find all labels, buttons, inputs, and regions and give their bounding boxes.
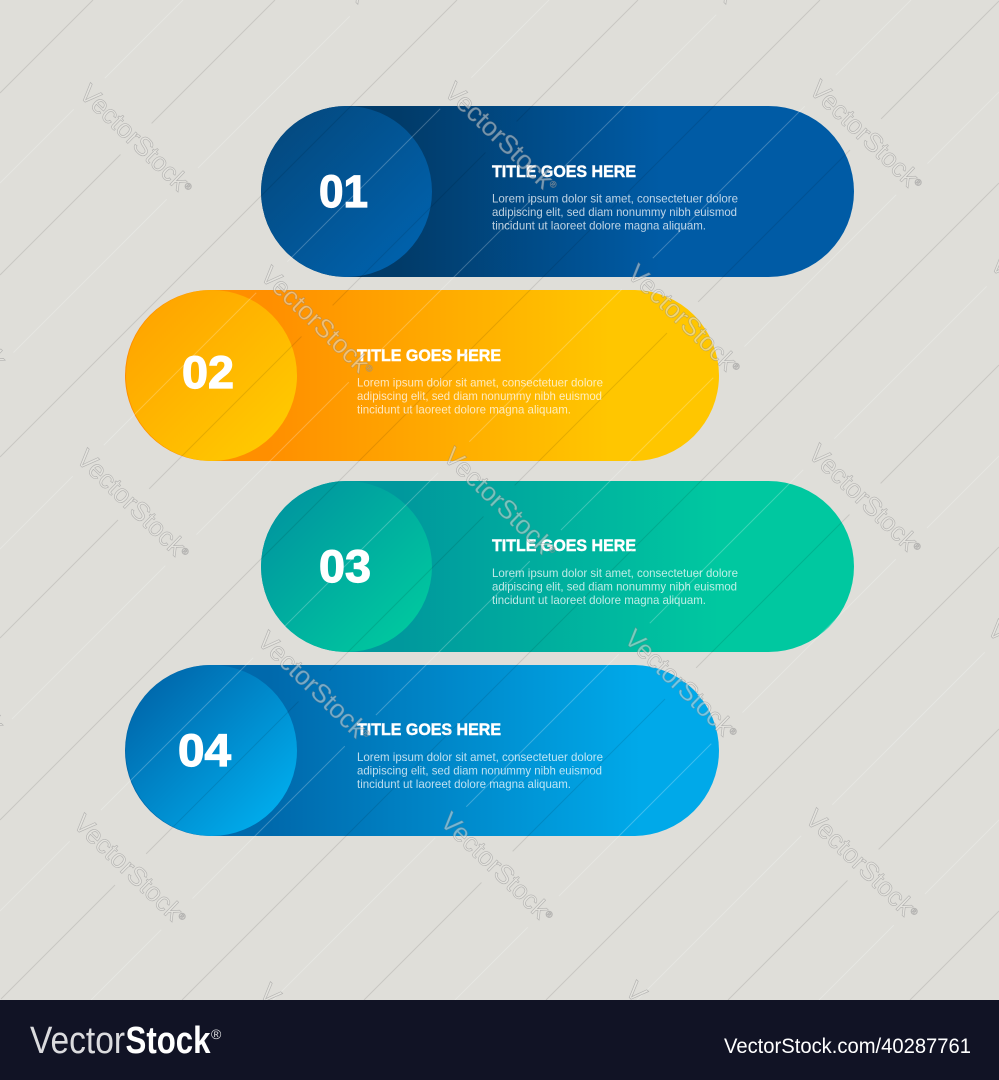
pill 01 xyxy=(261,106,854,277)
pill 03 xyxy=(261,481,854,652)
watermarks: ® xyxy=(912,177,924,189)
footer bar xyxy=(0,1000,999,1080)
circle 03 xyxy=(261,481,432,652)
watermarks: V xyxy=(254,977,287,1011)
watermarks: VectorStock xyxy=(74,78,194,196)
circle 01 xyxy=(261,106,432,277)
title 01: TITLE GOES HERE xyxy=(492,163,636,181)
number 02: 02 xyxy=(182,347,234,398)
watermarks: VectorStock xyxy=(255,260,375,378)
body text 04: tincidunt ut laoreet dolore magna aliquam. xyxy=(357,777,571,791)
watermarks: VectorStock xyxy=(622,258,742,376)
pill 02 xyxy=(125,290,719,461)
panel: step 02 xyxy=(125,290,719,461)
footer logo xyxy=(30,1020,222,1062)
title 04: TITLE GOES HERE xyxy=(357,721,501,739)
footer image id: VectorStock.com/40287761 xyxy=(724,1035,971,1058)
footer logo: Stock xyxy=(126,1020,211,1062)
watermarks: VectorStock xyxy=(439,76,559,194)
watermarks: ® xyxy=(179,546,191,558)
footer logo: Vector xyxy=(30,1020,125,1062)
body text 02: tincidunt ut laoreet dolore magna aliquam. xyxy=(357,402,571,416)
watermarks: V xyxy=(620,975,653,1009)
watermarks: ® xyxy=(543,909,555,921)
watermarks: ® xyxy=(730,361,742,373)
body text 03: tincidunt ut laoreet dolore magna aliquam. xyxy=(492,593,706,607)
watermarks: VectorStock xyxy=(619,623,739,741)
body text 04 xyxy=(357,750,603,791)
watermarks: ® xyxy=(727,726,739,738)
watermarks: ® xyxy=(176,911,188,923)
watermarks: VectorStock xyxy=(800,803,920,921)
watermarks: VectorStock xyxy=(252,625,372,743)
title 03: TITLE GOES HERE xyxy=(492,537,636,555)
watermarks: VectorStock xyxy=(803,438,923,556)
body text 02 xyxy=(357,376,603,416)
circle 04 xyxy=(126,665,297,836)
number 04: 04 xyxy=(178,725,231,776)
watermarks: ® xyxy=(911,541,923,553)
body text 01: Lorem ipsum dolor sit amet, consectetuer dolore xyxy=(492,192,738,206)
body text 01: adipiscing elit, sed diam nonummy nibh euismod xyxy=(492,205,737,219)
watermarks: VectorStock xyxy=(435,806,555,924)
body text 04: Lorem ipsum dolor sit amet, consectetuer dolore xyxy=(357,750,603,764)
watermarks: ® xyxy=(182,181,194,193)
circle 02 xyxy=(126,290,297,461)
body text 03: Lorem ipsum dolor sit amet, consectetuer dolore xyxy=(492,566,738,580)
body text 01 xyxy=(492,192,738,232)
body text 02: Lorem ipsum dolor sit amet, consectetuer dolore xyxy=(357,376,603,390)
watermarks: VectorStock xyxy=(438,441,558,559)
number 01: 01 xyxy=(319,166,368,217)
pill 04 xyxy=(125,665,719,836)
body text 03 xyxy=(492,566,738,607)
watermarks: ® xyxy=(908,906,920,918)
title 02: TITLE GOES HERE xyxy=(357,347,501,365)
panel: step 01 xyxy=(261,106,854,277)
footer logo: ® xyxy=(211,1026,222,1042)
watermarks: ® xyxy=(547,179,559,191)
panel: step 03 xyxy=(261,481,854,652)
watermarks: VectorStock xyxy=(804,74,924,192)
panel: step 04 xyxy=(125,665,719,836)
body text 01: tincidunt ut laoreet dolore magna aliquam. xyxy=(492,218,706,232)
number 03: 03 xyxy=(319,541,371,592)
watermarks: VectorStock xyxy=(68,808,188,926)
watermarks: ® xyxy=(363,363,375,375)
body text 02: adipiscing elit, sed diam nonummy nibh euismod xyxy=(357,389,602,403)
watermarks: ® xyxy=(546,544,558,556)
watermarks: VectorStock xyxy=(71,443,191,561)
watermarks: ® xyxy=(360,728,372,740)
body text 04: adipiscing elit, sed diam nonummy nibh euismod xyxy=(357,764,602,778)
body text 03: adipiscing elit, sed diam nonummy nibh euismod xyxy=(492,580,737,594)
